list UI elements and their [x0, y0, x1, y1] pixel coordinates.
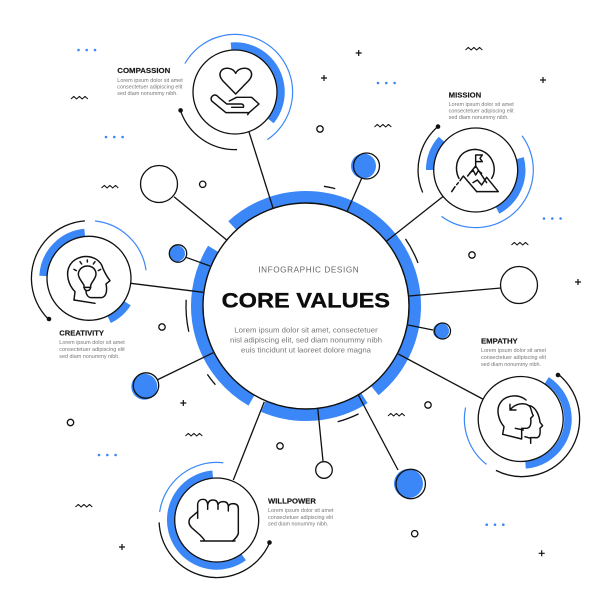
empathy circle	[478, 376, 563, 462]
empathy text: sed diam nonummy nibh.	[481, 362, 541, 368]
empathy heading: EMPATHY	[481, 336, 518, 345]
panel: creativity	[8, 197, 170, 360]
decorative small open circles	[67, 126, 475, 537]
center subtitle: INFOGRAPHIC DESIGN	[258, 265, 359, 274]
willpower text: Lorem ipsum dolor sit amet	[268, 508, 334, 514]
willpower arcs	[141, 444, 292, 596]
decorative blue dot triples	[77, 49, 562, 526]
mission text: consectetuer adipiscing elit	[449, 109, 514, 115]
compassion circle	[193, 50, 277, 134]
panel: willpower	[141, 444, 334, 596]
compassion text	[117, 78, 183, 97]
decorative plus signs	[119, 50, 581, 556]
compassion text: sed diam nonummy nibh.	[117, 91, 178, 97]
empathy text: Lorem ipsum dolor sit amet	[481, 348, 547, 354]
center description: Lorem ipsum dolor sit amet, consectetuer	[234, 326, 378, 335]
willpower text: consectetuer adipiscing elit	[268, 515, 334, 521]
panel: mission	[395, 89, 556, 251]
creativity text	[59, 340, 125, 360]
mission text: Lorem ipsum dolor sit amet	[449, 102, 514, 108]
node: upper left open circle	[140, 166, 178, 202]
mission text	[449, 102, 514, 121]
mission circle	[434, 128, 518, 212]
empathy text	[481, 348, 547, 368]
node: lower left blue circle	[131, 373, 159, 400]
willpower heading: WILLPOWER	[268, 496, 317, 505]
creativity circle	[47, 236, 131, 320]
node: bottom open circle	[316, 462, 332, 478]
compassion arcs	[157, 14, 313, 170]
mission heading: MISSION	[449, 90, 481, 99]
center description	[230, 326, 382, 355]
center description: nisl adipiscing elit, sed diam nonummy nibh	[230, 336, 382, 345]
creativity text: sed diam nonummy nibh.	[59, 354, 120, 360]
icon: heart in hand	[211, 68, 259, 115]
connector lines	[131, 132, 501, 480]
node: right open circle	[500, 266, 538, 304]
creativity arcs	[8, 197, 170, 360]
compassion text: consectetuer adipiscing elit	[117, 85, 183, 91]
icon: head with light bulb	[68, 256, 110, 303]
mission text: sed diam nonummy nibh.	[449, 115, 509, 121]
willpower text: sed diam nonummy nibh.	[268, 522, 328, 528]
decorative squiggles	[71, 47, 528, 507]
node: top blue circle	[351, 153, 380, 179]
panel: compassion	[117, 14, 313, 170]
creativity text: Lorem ipsum dolor sit amet	[59, 340, 125, 346]
compassion text: Lorem ipsum dolor sit amet	[117, 78, 183, 84]
compassion heading: COMPASSION	[117, 66, 170, 75]
center title: CORE VALUES	[222, 289, 390, 313]
willpower circle	[175, 478, 259, 562]
node: right small blue circle	[433, 323, 450, 339]
center description: euis tincidunt ut laoreet dolore magna	[241, 346, 372, 355]
creativity heading: CREATIVITY	[59, 328, 104, 337]
center circle	[203, 203, 409, 409]
creativity text: consectetuer adipiscing elit	[59, 347, 125, 353]
center ring: blue segments	[152, 152, 460, 460]
mission arcs	[395, 89, 556, 251]
short accent arcs around ring	[137, 137, 475, 475]
node: upper left small blue circle	[169, 245, 187, 262]
panel: empathy	[441, 336, 603, 500]
willpower text	[268, 508, 334, 528]
icon: two heads with arrow	[498, 396, 543, 443]
icon: raised fist	[189, 499, 238, 541]
node: bottom right blue circle	[394, 469, 425, 499]
icon: mountain with flag	[452, 149, 498, 192]
empathy arcs	[441, 338, 603, 500]
empathy text: consectetuer adipiscing elit	[481, 355, 547, 361]
